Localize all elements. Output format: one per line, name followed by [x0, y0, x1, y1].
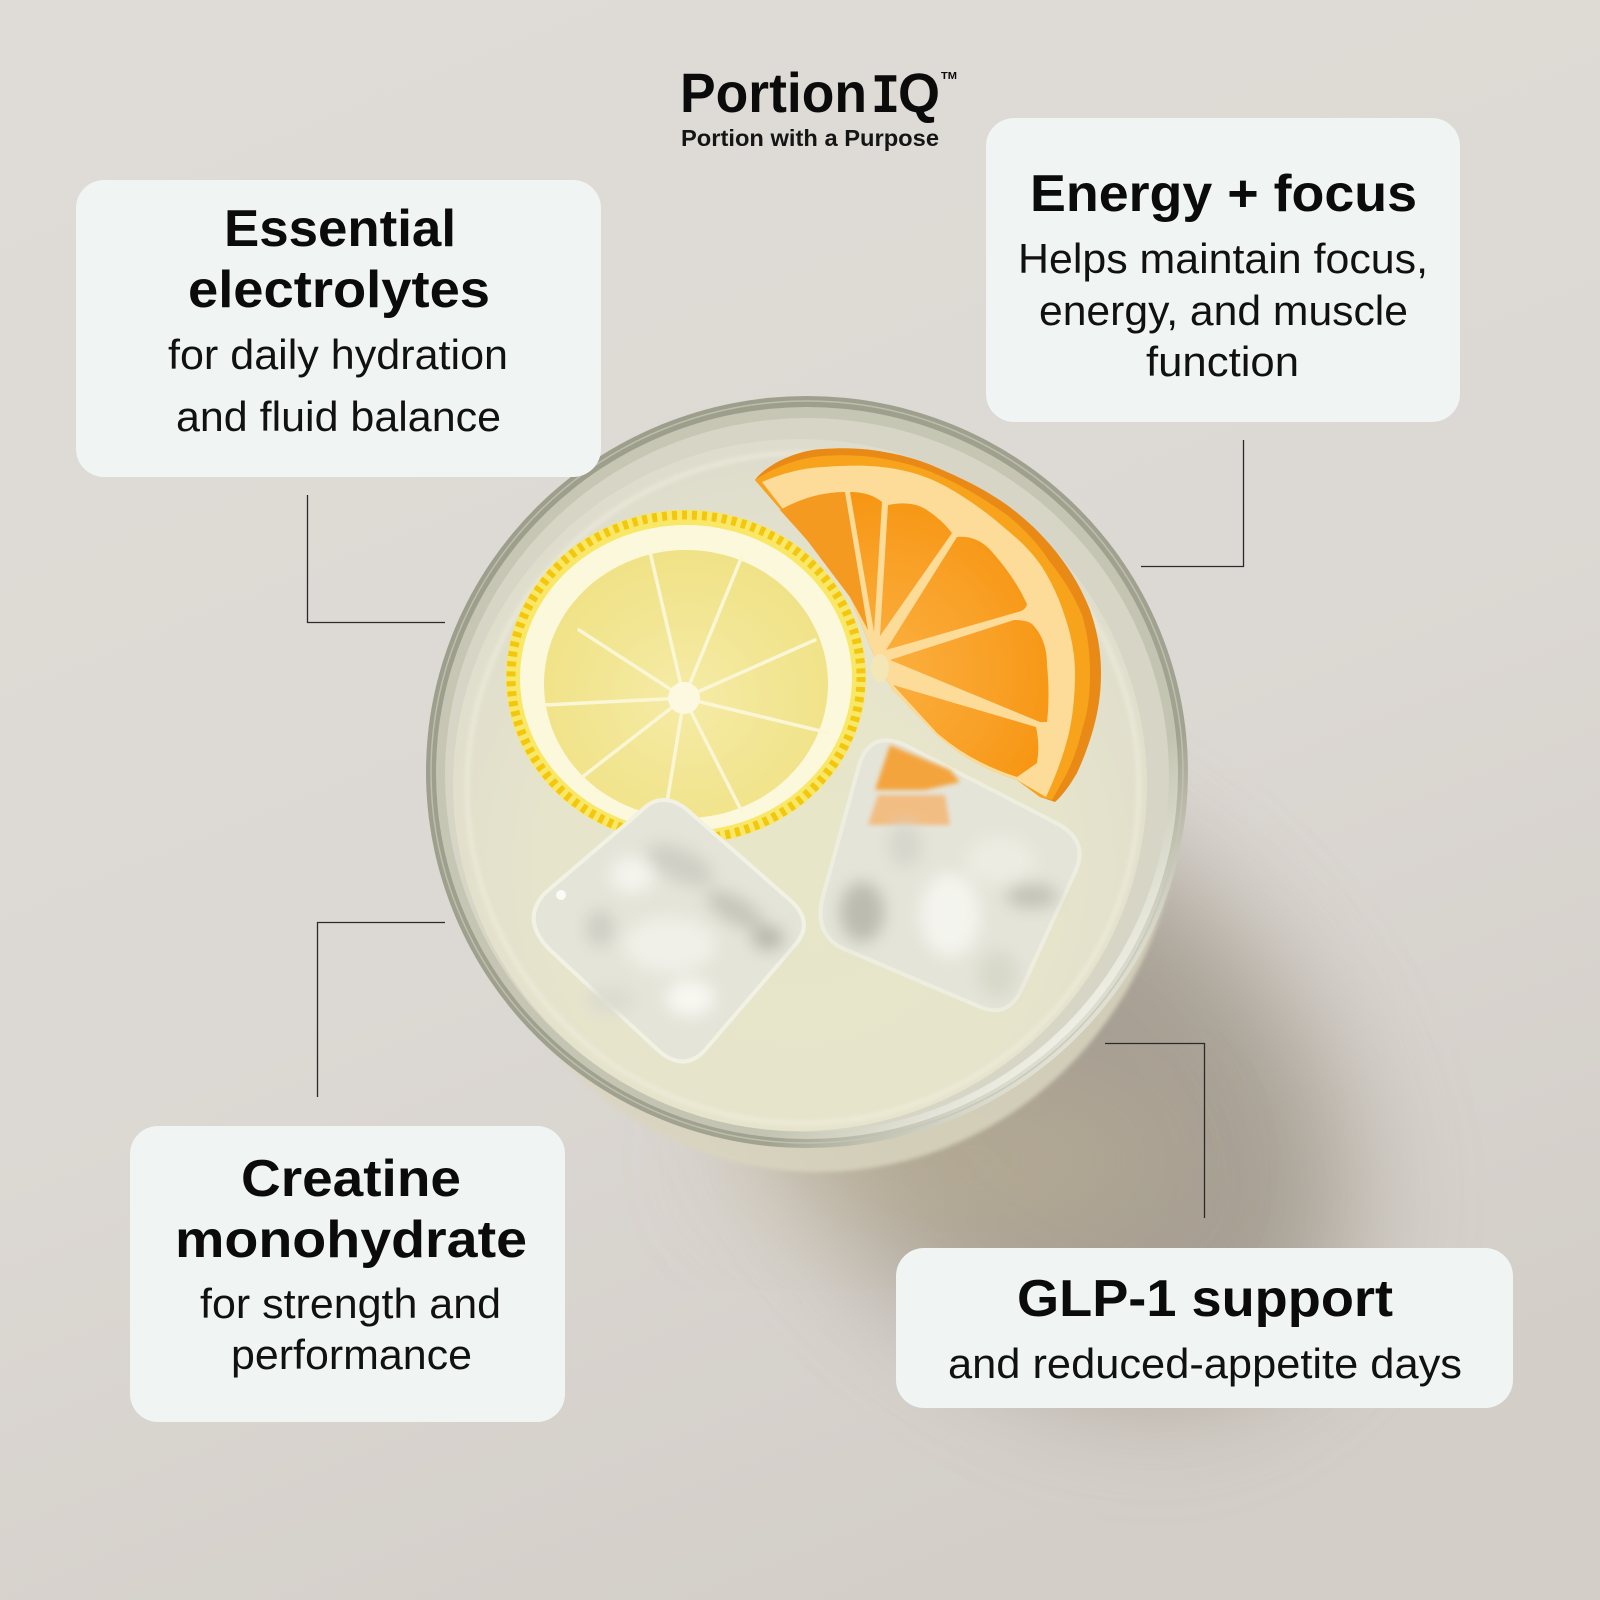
lemon flesh: [544, 550, 828, 818]
lemon pith: [520, 525, 852, 831]
orange pith: [762, 466, 1075, 797]
glass of lemon drink: [426, 396, 1188, 1172]
orange slice: [755, 448, 1101, 802]
logo: [680, 61, 957, 151]
trademark: TM: [941, 71, 957, 82]
connector: creatine: [318, 922, 445, 1097]
liquid: [453, 439, 1147, 1131]
heading: electrolytes: [188, 261, 490, 319]
heading: [175, 1150, 527, 1269]
orange outer rind: [755, 448, 1101, 802]
wordmark: Q: [898, 61, 940, 124]
glass outer wall: [456, 412, 1180, 1172]
body text: Helps maintain focus,: [1018, 235, 1428, 282]
tagline: Portion with a Purpose: [681, 125, 939, 151]
heading: monohydrate: [175, 1211, 527, 1269]
heading: GLP-1 support: [1017, 1270, 1393, 1328]
orange hub: [871, 654, 889, 682]
heading: [188, 200, 490, 319]
callout: energy + focus: [986, 118, 1460, 422]
orange mid rind: [755, 455, 1090, 800]
orange reflection in ice: [868, 745, 960, 825]
glass cast shadow: [633, 673, 1467, 1507]
body text: [200, 1280, 501, 1378]
connector: energy: [1141, 440, 1244, 566]
callout: essential electrolytes: [76, 180, 601, 477]
wordmark: Portion: [680, 61, 867, 124]
body text: for strength and: [200, 1280, 501, 1327]
callout: GLP-1 support: [896, 1248, 1513, 1408]
lemon slice: [506, 510, 866, 844]
connector: electrolytes: [308, 495, 445, 622]
callout: creatine monohydrate: [130, 1126, 565, 1422]
lemon membranes: [545, 552, 829, 815]
orange flesh segments: [780, 492, 1048, 777]
wordmark: I: [871, 65, 900, 129]
heading: Energy + focus: [1030, 165, 1417, 223]
lemon rind: [506, 510, 866, 844]
ice cube left: [534, 800, 804, 1062]
body text: [168, 331, 508, 440]
body text: [1018, 235, 1428, 385]
body text: function: [1146, 338, 1299, 385]
heading: Creatine: [241, 1150, 461, 1208]
ice cube right: [821, 740, 1080, 1010]
wordmark: [680, 61, 940, 129]
body text: and fluid balance: [176, 393, 501, 440]
body text: for daily hydration: [168, 331, 508, 378]
body text: performance: [231, 1331, 472, 1378]
body text: and reduced-appetite days: [948, 1340, 1462, 1387]
glass rim: [426, 396, 1188, 1148]
connector: GLP-1: [1105, 1044, 1204, 1218]
body text: energy, and muscle: [1039, 287, 1408, 334]
heading: Essential: [224, 200, 456, 258]
